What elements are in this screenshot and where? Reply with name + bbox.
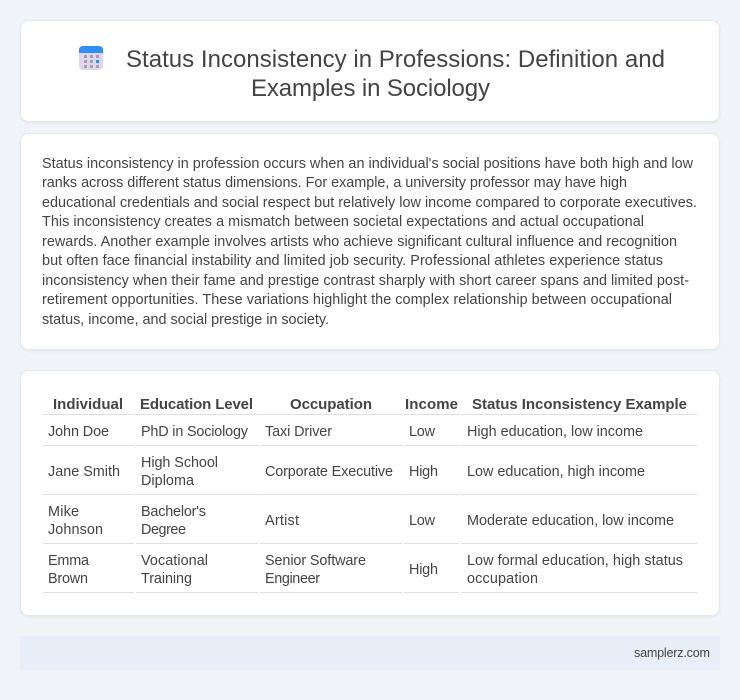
text block: definition paragraph: inconsistency when their fame and prestige contrast sharply with short career spans and limited post- [42,273,689,289]
footer [20,636,720,670]
table header: Occupation [290,396,372,413]
table row: Mike Johnson: Johnson [48,522,103,538]
table header: Individual [53,396,123,413]
text block: definition paragraph: This inconsistency creates a mismatch between societal expectations and actual occupational [42,214,644,230]
text block: definition paragraph: Status inconsistency in profession occurs when an individual's social positions have both high and low [42,156,694,172]
table row: Mike Johnson [48,504,674,538]
panel: title card [20,20,720,122]
table row: Emma Brown: Low formal education, high status [467,553,683,569]
table row: Jane Smith: Low education, high income [467,464,645,480]
table row: Mike Johnson: Low [409,513,436,529]
text block: definition paragraph: status, income, and social prestige in society. [42,312,329,328]
footer credit: samplerz.com [634,646,710,660]
text block: definition paragraph: educational credentials and social respect but relatively low income compared to corporate executives. [42,195,697,211]
table header: Education Level [140,396,253,413]
title [126,46,665,102]
table row: Jane Smith: Corporate Executive [265,464,393,480]
table row: Emma Brown: Brown [48,571,88,587]
text block: definition paragraph [42,156,697,328]
table row: Emma Brown: Senior Software [265,553,366,569]
table row: Emma Brown: Vocational [141,553,208,569]
table row: Emma Brown: Training [141,571,192,587]
table row: Emma Brown: Engineer [265,571,320,587]
panel: table card [20,370,720,616]
table row: Mike Johnson: Artist [265,513,299,529]
table row: Mike Johnson: Bachelor's [141,504,206,520]
text block: definition paragraph: but often face financial instability and limited job security. Professional athletes experience status [42,253,663,269]
table row: John Doe: High education, low income [467,424,643,440]
table header: Status Inconsistency Example [472,396,687,413]
table row: Jane Smith: Jane Smith [48,464,120,480]
table row: John Doe: PhD in Sociology [141,424,249,440]
table row: Emma Brown: High [409,562,438,578]
text block: definition paragraph: retirement opportunities. These variations highlight the complex relationship between occupational [42,292,672,308]
panel: description [20,134,720,350]
table row: Emma Brown: Emma [48,553,89,569]
table row: John Doe: Taxi Driver [265,424,332,440]
table row: Mike Johnson: Moderate education, low income [467,513,674,529]
table row: Jane Smith: High School [141,455,218,471]
table row: John Doe: Low [409,424,436,440]
table row: John Doe [48,424,643,440]
table row: Jane Smith: High [409,464,438,480]
table row: Emma Brown [48,553,683,587]
table row: Mike Johnson: Degree [141,522,186,538]
table grid lines [43,414,697,593]
text block: definition paragraph: ranks across different status dimensions. For example, a university professor may have high [42,175,627,191]
table row: Mike Johnson: Mike [48,504,79,520]
icon: calendar [79,46,103,70]
table row: John Doe: John Doe [48,424,109,440]
table row: Jane Smith [48,455,645,489]
title: Status Inconsistency in Professions: Definition and [126,46,665,73]
table header: Income [405,396,458,413]
table row: Jane Smith: Diploma [141,473,194,489]
text block: definition paragraph: rewards. Another example involves artists who achieve significant cultural influence and recognition [42,234,677,250]
table row: Emma Brown: occupation [467,571,538,587]
title: Examples in Sociology [251,75,490,102]
table header [53,396,687,413]
